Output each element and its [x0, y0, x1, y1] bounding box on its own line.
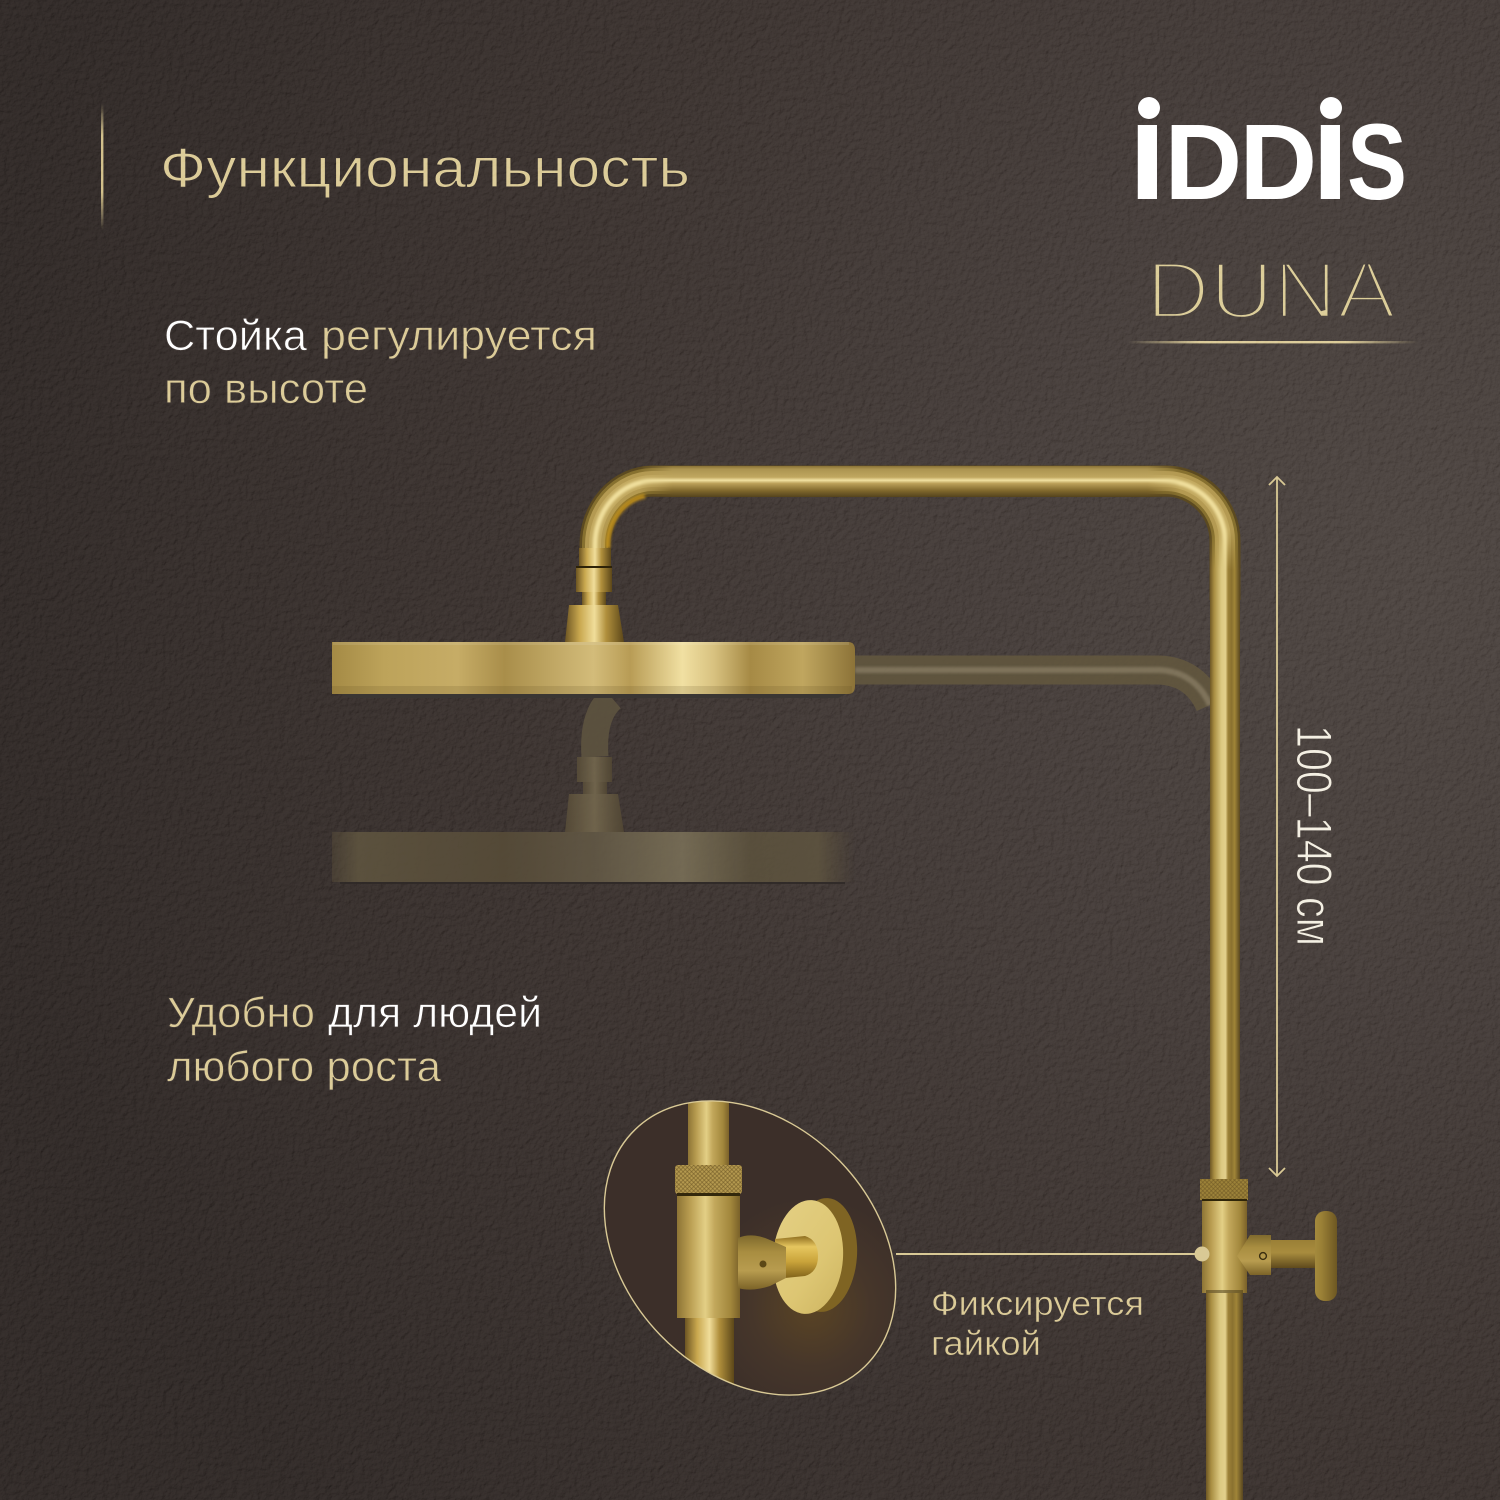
shower arm and riser pipe — [579, 466, 1243, 1500]
callout leader line and marker — [896, 1246, 1210, 1262]
brand logo: IDDIS: i — [1311, 72, 1350, 229]
shower head: upper position — [332, 566, 855, 698]
callout text: fixed with a nut: гайкой — [931, 1325, 1041, 1363]
ghost shower head: lower position — [332, 670, 1210, 884]
text block: comfortable for any height — [167, 989, 542, 1091]
callout text: fixed with a nut — [931, 1285, 1144, 1363]
underline below series name — [1128, 341, 1418, 343]
text block: comfortable for any height: для людей — [328, 989, 542, 1037]
text block: height adjustable stand: Стойка — [164, 312, 307, 360]
callout text: fixed with a nut: Фиксируется — [931, 1285, 1144, 1323]
brand logo: IDDIS: i — [1128, 72, 1167, 229]
vertical accent line — [101, 104, 103, 230]
brand logo: IDDIS — [1138, 97, 1404, 200]
series name: DUNA: DUNA — [1146, 246, 1396, 336]
height range label: 100–140 см — [1286, 725, 1342, 946]
title: Функциональность — [160, 136, 690, 199]
detail inset: lock nut close-up — [604, 1100, 896, 1396]
brand logo: IDDIS: S — [1347, 102, 1407, 222]
brand logo: IDDIS: D — [1164, 102, 1242, 222]
brand logo: IDDIS: D — [1240, 102, 1317, 222]
text block: height adjustable stand: по высоте — [164, 365, 368, 413]
text block: height adjustable stand — [164, 312, 597, 413]
text block: comfortable for any height: любого роста — [167, 1043, 441, 1091]
mixer connector on riser with lock nut — [1200, 1179, 1337, 1301]
text block: comfortable for any height: Удобно — [167, 989, 315, 1037]
dimension arrow — [1269, 477, 1285, 1176]
text block: height adjustable stand: регулируется — [321, 312, 597, 360]
